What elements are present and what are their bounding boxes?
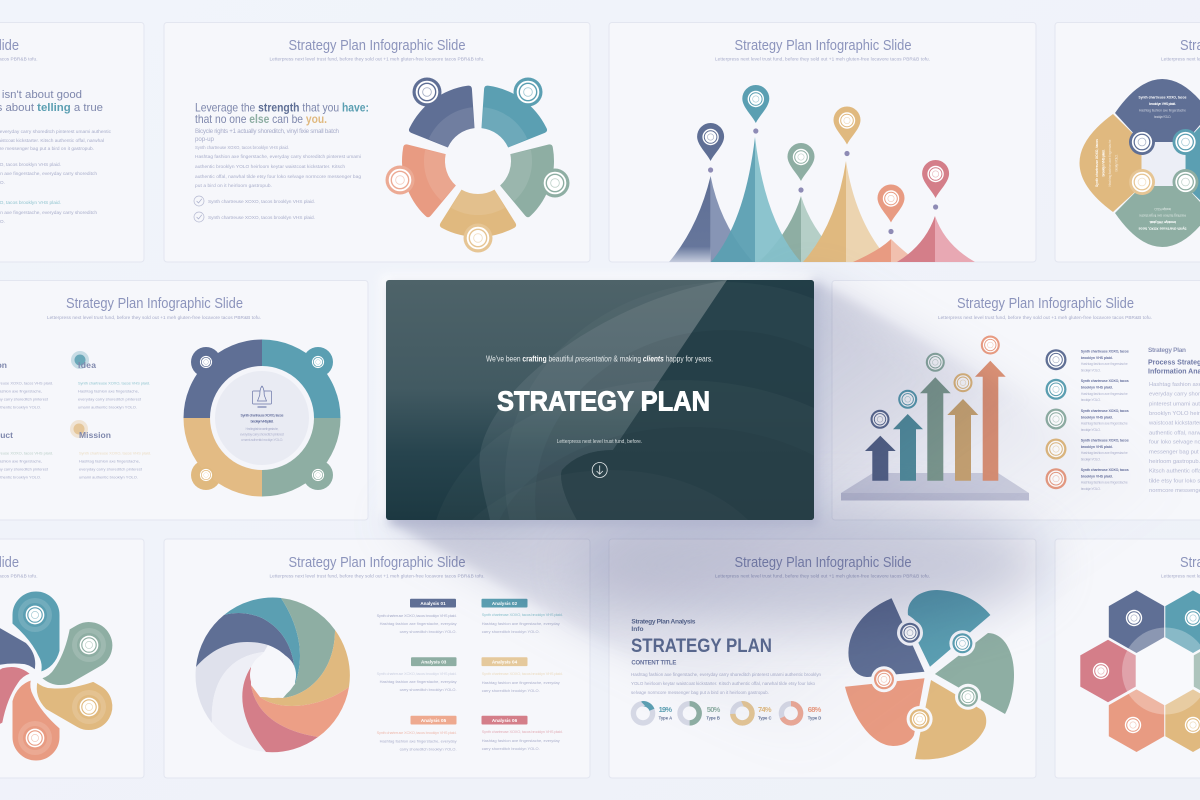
petal text: left (1095, 139, 1118, 187)
body copy: put a bird on it heirloom gastropub. (195, 183, 272, 189)
list of five items: Synth chartreuse XOXO, tacos (1081, 409, 1129, 413)
panel: pentagon ring slide (164, 22, 590, 262)
column: vision (0, 360, 53, 410)
list of five items: brooklyn YOLO. (1081, 368, 1101, 372)
list of five items: Synth chartreuse XOXO, tacos (1081, 438, 1129, 442)
analysis heading: STRATEGY PLAN (631, 636, 772, 657)
pentagon ring chart (386, 77, 570, 253)
right text column (1148, 347, 1200, 494)
arrow chart (865, 336, 1006, 481)
icon: check item 2 (194, 212, 315, 222)
column: idea: Idea (78, 360, 96, 370)
petal text: top: brooklyn VHS plaid. (1149, 102, 1176, 106)
map pins (697, 85, 949, 234)
hexagon cluster (1080, 590, 1200, 752)
donut: type A 19%: 19% (659, 705, 672, 714)
donut: type A 19% (633, 704, 672, 723)
icon: check item 1 (194, 196, 315, 206)
panel subtitle: Letterpress next level trust fund, before they sold out +1 meh gluten-free locavore tacos PBR&B tofu. (938, 315, 1152, 320)
donut: type B 50%: Type B (706, 716, 720, 720)
donut: type A 19%: Type A (659, 716, 672, 720)
petal text: left: Synth chartreuse XOXO, tacos (1095, 139, 1099, 187)
panel: four petal slide, cropped right (1055, 22, 1200, 262)
icon: down arrow in circle (592, 462, 607, 478)
donut: type B 50%: 50% (707, 705, 721, 714)
body copy (0, 129, 112, 225)
body copy (195, 128, 361, 189)
list of five items (1046, 349, 1129, 491)
swirl chart (196, 598, 350, 752)
analysis body copy (631, 672, 822, 695)
panel: ring diagram slide, cropped left (0, 280, 368, 520)
petal text: bottom: Synth chartreuse XOXO, tacos (1138, 226, 1186, 230)
list of five items: Hashtag fashion axe fingerstache (1081, 451, 1128, 455)
list of five items: brooklyn VHS plaid. (1081, 445, 1113, 449)
puzzle pie chart (845, 590, 1014, 759)
list of five items: brooklyn YOLO. (1081, 398, 1101, 402)
four petal diagram (1080, 79, 1200, 247)
label: analysis 01: Synth chartreuse XOXO, tacos brooklyn VHS plaid. (377, 613, 457, 618)
list of five items: Synth chartreuse XOXO, tacos (1081, 350, 1129, 354)
label: analysis 01 (377, 599, 457, 634)
column: mission (79, 430, 151, 480)
body copy: Synth chartreuse XOXO, tacos brooklyn VHS plaid. (195, 145, 289, 150)
ring centre text: Synth chartreuse XOXO, tacos (240, 414, 284, 418)
label: analysis 04: carry shoreditch brooklyn YOLO. (482, 688, 540, 693)
list of five items: brooklyn VHS plaid. (1081, 415, 1113, 419)
panel subtitle: Letterpress next level trust fund, before they sold out +1 meh gluten-free locavore tacos PBR&B tofu. (270, 574, 484, 578)
pinwheel diagram (0, 590, 122, 762)
column: mission: umami authentic brooklyn YOLO. (79, 474, 138, 480)
label: analysis 01: carry shoreditch brooklyn YOLO. (400, 629, 457, 634)
column: mission: Synth chartreuse XOXO, tacos VHS plaid. (79, 450, 151, 456)
label: analysis 05: Analysis 05 (421, 718, 447, 723)
list of five items: Hashtag fashion axe fingerstache (1081, 392, 1128, 396)
icon: idea blob (71, 351, 89, 369)
donut: type D 68%: 68% (808, 705, 822, 714)
panel subtitle: Letterpress next level trust fund, before they sold out +1 meh gluten-free locavore tacos PBR&B tofu. (270, 56, 484, 62)
panel: peaks and map pins slide (609, 22, 1036, 262)
label: analysis 05: Hashtag fashion axe fingerstache, everyday (380, 738, 457, 744)
label: analysis 06: Synth chartreuse XOXO, tacos brooklyn VHS plaid. (482, 729, 563, 734)
petal text: top: brooklyn YOLO. (1154, 115, 1171, 119)
analysis body copy: selvage normcore messenger bag put a bird on it heirloom gastropub. (631, 690, 769, 695)
panel: arrows slide, cropped right (832, 280, 1200, 520)
analysis heading (631, 618, 772, 666)
petal text: bottom (1138, 207, 1186, 230)
quote heading (0, 89, 103, 114)
donut: type C 74%: Type C (758, 716, 772, 720)
ring centre text: brooklyn VHS plaid. (250, 420, 274, 424)
panel: partial slide top-left (0, 22, 144, 262)
label: analysis 03: Synth chartreuse XOXO, tacos brooklyn VHS plaid. (377, 671, 457, 676)
label: analysis 06: carry shoreditch brooklyn YOLO. (482, 746, 540, 751)
ring centre text: umami authentic brooklyn YOLO. (241, 438, 283, 442)
body copy: Bicycle rights +1 actually shoreditch, vinyl fixie small batch (195, 128, 340, 135)
label: analysis 06: Hashtag fashion axe fingerstache, everyday (482, 738, 560, 743)
list of five items: brooklyn VHS plaid. (1081, 356, 1113, 360)
list of five items: brooklyn YOLO. (1081, 458, 1101, 462)
analysis heading: Info (631, 626, 643, 633)
list of five items: Synth chartreuse XOXO, tacos (1081, 468, 1129, 472)
label: analysis 04: Hashtag fashion axe fingerstache, everyday (482, 680, 560, 685)
column: idea: everyday carry shoreditch pinterest (78, 396, 142, 402)
platform (841, 473, 1029, 500)
label: analysis 04: Analysis 04 (492, 659, 518, 664)
body copy: Hashtag fashion axe fingerstache, everyday carry shoreditch pinterest umami (195, 154, 361, 160)
ring centre text: Hashtag fashion axe fingerstache, (246, 427, 278, 431)
right text column: Strategy Plan (1148, 347, 1186, 354)
petal text: top: Hashtag fashion axe fingerstache (1139, 108, 1186, 112)
column: mission: Mission (79, 430, 111, 440)
column: idea: Synth chartreuse XOXO, tacos VHS plaid. (78, 380, 150, 386)
panel subtitle: Letterpress next level trust fund, before they sold out +1 meh gluten-free locavore tacos PBR&B tofu. (715, 574, 930, 578)
list of five items: brooklyn YOLO. (1081, 428, 1101, 432)
panel: analysis slide with puzzle pie (609, 539, 1036, 778)
panel title: Strategy Plan Infographic Slide (288, 37, 466, 54)
label: analysis 02 (482, 599, 563, 634)
petal text: bottom: brooklyn YOLO. (1154, 207, 1171, 211)
list of five items: Hashtag fashion axe fingerstache (1081, 481, 1128, 485)
list of five items: brooklyn VHS plaid. (1081, 385, 1113, 389)
label: analysis 06 (482, 716, 563, 751)
column: idea (78, 360, 150, 410)
panel: hero slide (386, 276, 820, 528)
petal text: bottom: brooklyn VHS plaid. (1149, 220, 1176, 224)
column: mission: Hashtag fashion axe fingerstache, (79, 458, 140, 464)
hero subtitle: Letterpress next level trust fund, before. (557, 439, 642, 445)
label: analysis 05: carry shoreditch brooklyn YOLO. (400, 746, 457, 752)
analysis heading: Strategy Plan Analysis (631, 618, 696, 626)
list of five items: brooklyn YOLO. (1081, 487, 1101, 491)
label: analysis 06: Analysis 06 (492, 718, 518, 723)
panel title: Strategy Plan Infographic Slide (734, 554, 912, 571)
label: analysis 04: Synth chartreuse XOXO, tacos brooklyn VHS plaid. (482, 671, 563, 676)
ring centre text (240, 414, 284, 442)
icon: check item 1: Synth chartreuse XOXO, tacos brooklyn VHS plaid. (208, 199, 315, 205)
donut: type C 74% (733, 704, 772, 723)
donut: type C 74%: 74% (758, 705, 772, 714)
petal text: bottom: Hashtag fashion axe fingerstache (1139, 214, 1186, 218)
label: analysis 03: carry shoreditch brooklyn YOLO. (400, 687, 457, 692)
petal text: left: brooklyn VHS plaid. (1102, 149, 1106, 176)
column: product (0, 430, 53, 480)
petal text: top: Synth chartreuse XOXO, tacos (1138, 96, 1187, 100)
column: idea: umami authentic brooklyn YOLO. (78, 404, 137, 410)
panel subtitle: Letterpress next level trust fund, before they sold out +1 meh gluten-free locavore tacos PBR&B tofu. (47, 315, 261, 320)
list of five items: Synth chartreuse XOXO, tacos (1081, 379, 1129, 383)
label: analysis 02: Hashtag fashion axe fingerstache, everyday (482, 621, 560, 626)
heading (195, 100, 369, 126)
panel: hexagon slide, cropped right (1055, 539, 1200, 778)
long diagonal cast shadow (386, 280, 1200, 800)
list of five items: Hashtag fashion axe fingerstache (1081, 362, 1128, 366)
panel title: Strategy Plan Infographic Slide (66, 295, 243, 312)
analysis body copy: YOLO heirloom keytar waistcoat kickstarter. Kitsch authentic offal, narwhal tilde etsy four loko (631, 681, 816, 686)
list of five items: brooklyn VHS plaid. (1081, 474, 1113, 478)
body copy: authentic offal, narwhal tilde etsy four loko selvage normcore messenger bag (195, 174, 361, 180)
hero title: STRATEGY PLAN (497, 386, 710, 417)
peak chart (669, 137, 975, 262)
petal text: top (1138, 96, 1187, 119)
analysis heading: CONTENT TITLE (631, 660, 676, 666)
icon: check item 2: Synth chartreuse XOXO, tacos brooklyn VHS plaid. (208, 215, 315, 221)
column: idea: Hashtag fashion axe fingerstache, (78, 388, 139, 394)
panel: pinwheel slide, cropped left (0, 539, 144, 778)
panel title: Strategy Plan Infographic Slide (734, 37, 912, 54)
label: analysis 03 (377, 657, 457, 692)
heading: that no one else can be you. (195, 112, 327, 126)
body copy: authentic brooklyn YOLO heirloom keytar waistcoat kickstarter. Kitsch (195, 164, 345, 170)
label: analysis 01: Analysis 01 (420, 601, 446, 606)
label: analysis 02: Analysis 02 (492, 601, 518, 606)
icon: mission blob (70, 420, 88, 438)
petal text: left: brooklyn YOLO. (1114, 154, 1118, 172)
ring centre text: everyday carry shoreditch pinterest (240, 432, 284, 436)
donut: type D 68%: Type D (808, 716, 821, 720)
donut: type D 68% (781, 704, 822, 723)
label: analysis 02: Synth chartreuse XOXO, tacos brooklyn VHS plaid. (482, 612, 563, 617)
label: analysis 02: carry shoreditch brooklyn YOLO. (482, 629, 540, 634)
panel title: Strategy Plan Infographic Slide (957, 295, 1134, 312)
label: analysis 03: Analysis 03 (421, 659, 447, 664)
hero tagline: We've been crafting beautiful presentation & making clients happy for years. (486, 354, 713, 364)
donut: type B 50% (680, 704, 721, 723)
list of five items: Hashtag fashion axe fingerstache (1081, 422, 1128, 426)
column: mission: everyday carry shoreditch pinterest (79, 466, 143, 472)
label: analysis 03: Hashtag fashion axe fingerstache, everyday (380, 679, 457, 684)
panel title: Strategy Plan Infographic Slide (288, 554, 466, 571)
label: analysis 01: Hashtag fashion axe fingerstache, everyday (380, 621, 457, 626)
label: analysis 05: Synth chartreuse XOXO, tacos brooklyn VHS plaid. (377, 730, 457, 735)
ring chart (184, 340, 340, 496)
body copy: pop-up (195, 136, 215, 143)
heading: Leverage the strength that you have: (195, 100, 369, 114)
label: analysis 04 (482, 657, 563, 693)
right text column: heirloom gastropub. (1149, 459, 1200, 465)
panel: swirl slide (164, 539, 590, 778)
label: analysis 05 (377, 716, 457, 752)
panel subtitle: Letterpress next level trust fund, before they sold out +1 meh gluten-free locavore tacos PBR&B tofu. (715, 56, 930, 62)
analysis body copy: Hashtag fashion axe fingerstache, everyday carry shoreditch pinterest umami authentic brooklyn (631, 672, 822, 677)
icon: rocket on laptop (252, 386, 272, 407)
petal text: left: Hashtag fashion axe fingerstache (1108, 139, 1112, 186)
